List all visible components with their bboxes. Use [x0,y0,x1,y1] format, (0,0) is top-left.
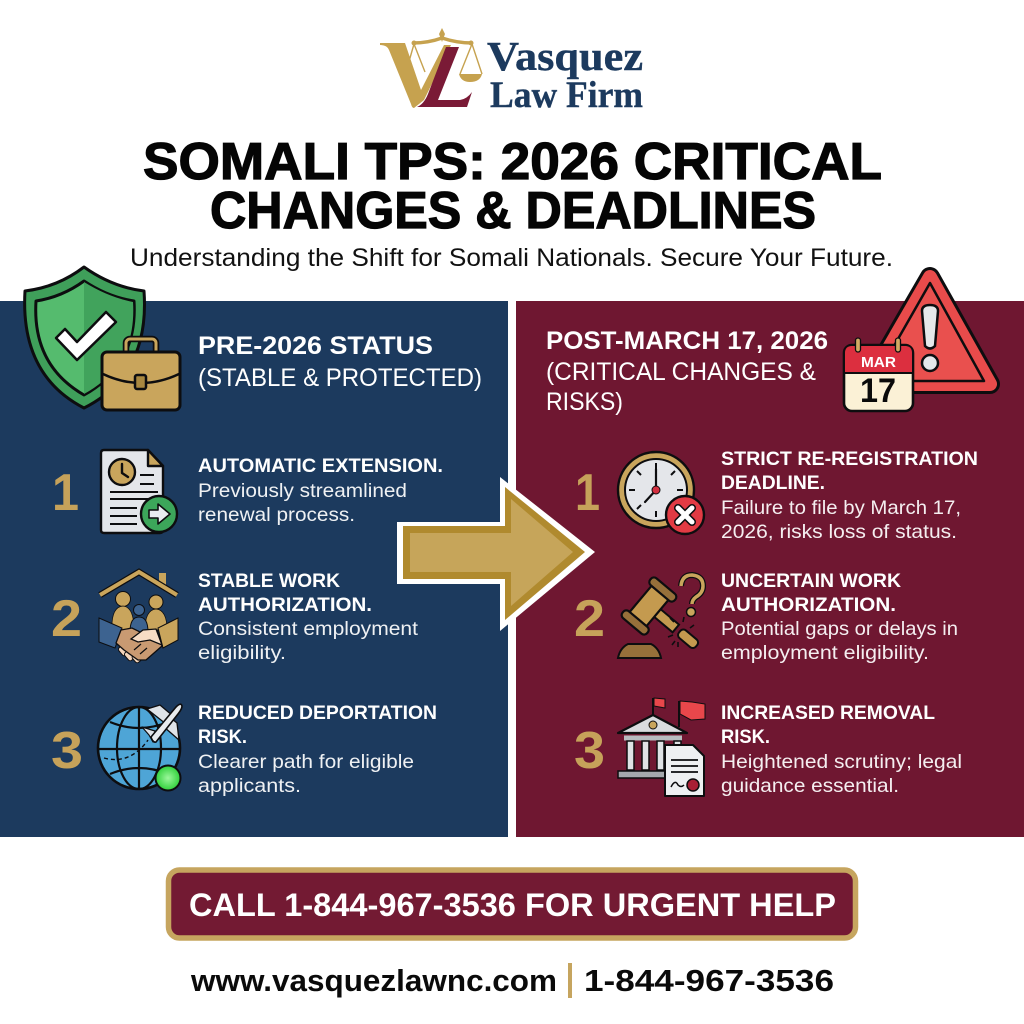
text: strict re-registration [721,448,978,543]
text: strict re-registration: STRICT RE-REGISTRATION [721,448,978,470]
text: stable work authorization: eligibility. [198,642,286,664]
footer contact line [190,963,834,998]
text: stable work authorization: AUTHORIZATION. [198,594,372,616]
text: strict re-registration: 2026, risks loss of status. [721,521,957,543]
number 2: 2 [51,590,82,648]
heading: pre-2026: (STABLE & PROTECTED) [198,364,482,392]
logo mark: scales with VL monogram [380,28,482,108]
icon: calendar march 17: MAR [861,355,897,371]
logo wordmark [487,33,643,116]
text: reduced deportation risk: RISK. [198,726,247,748]
heading: pre-2026 [198,332,482,392]
icon: globe, plane and green dot [98,704,182,790]
text: reduced deportation risk: applicants. [198,775,301,797]
number 3: 3 [51,722,83,780]
heading: post-march 17: POST-MARCH 17, 2026 [546,327,828,355]
icon: green shield with check [25,267,144,408]
text: uncertain work authorization: Potential gaps or delays in [721,618,958,640]
text: increased removal risk: RISK. [721,726,770,748]
footer contact line: www.vasquezlawnc.com [190,963,557,998]
icon: briefcase [102,339,180,410]
text: strict re-registration: DEADLINE. [721,472,825,494]
call to action button [168,870,856,938]
call to action button: CALL 1-844-967-3536 FOR URGENT HELP [189,887,836,923]
text: stable work authorization [198,570,419,664]
icon: calendar march 17: 17 [860,372,896,410]
text: increased removal risk [721,702,962,797]
text: automatic extension: renewal process. [198,504,355,526]
text: reduced deportation risk: Clearer path for eligible [198,751,414,773]
title: CHANGES & DEADLINES [210,182,816,240]
text: uncertain work authorization [721,570,958,664]
logo wordmark: Vasquez [487,33,643,79]
number 1: 1 [575,464,600,522]
text: uncertain work authorization: UNCERTAIN WORK [721,570,901,592]
heading: post-march 17: (CRITICAL CHANGES & [546,358,816,386]
arrow: from pre-2026 to post-march [397,477,595,631]
text: stable work authorization: Consistent employment [198,618,419,640]
panel: post-march 17 2026 [516,277,1024,837]
logo wordmark: Law Firm [490,75,643,116]
text: automatic extension [198,455,443,526]
text: automatic extension: AUTOMATIC EXTENSION. [198,455,443,477]
icon: warning triangle [868,277,990,384]
text: increased removal risk: INCREASED REMOVAL [721,702,935,724]
text: uncertain work authorization: employment eligibility. [721,642,929,664]
title [143,133,882,240]
icon: renewal document [101,450,177,533]
icon: family, home and handshake [99,572,178,664]
text: increased removal risk: Heightened scrutiny; legal [721,751,962,773]
heading: post-march 17: RISKS) [546,388,623,416]
text: automatic extension: Previously streamlined [198,480,407,502]
text: strict re-registration: Failure to file by March 17, [721,497,961,519]
number 2: 2 [574,590,605,648]
number 3: 3 [574,722,605,780]
logo [380,28,643,116]
heading: post-march 17 [546,327,828,416]
text: increased removal risk: guidance essential. [721,775,899,797]
panel: pre-2026 status [0,267,508,837]
icon: calendar march 17 [844,338,913,411]
text: uncertain work authorization: AUTHORIZATION. [721,594,896,616]
number 1: 1 [52,464,79,522]
icon: cracked gavel and question mark [618,575,713,666]
title: SOMALI TPS: 2026 CRITICAL [143,133,882,191]
text: reduced deportation risk [198,702,437,797]
footer contact line: 1-844-967-3536 [584,963,834,998]
text: stable work authorization: STABLE WORK [198,570,340,592]
icon: courthouse, flags and document [618,698,705,796]
text: reduced deportation risk: REDUCED DEPORTATION [198,702,437,724]
icon: clock with x badge [618,452,704,534]
heading: pre-2026: PRE-2026 STATUS [198,332,433,360]
subtitle: Understanding the Shift for Somali Nationals. Secure Your Future. [130,244,893,272]
